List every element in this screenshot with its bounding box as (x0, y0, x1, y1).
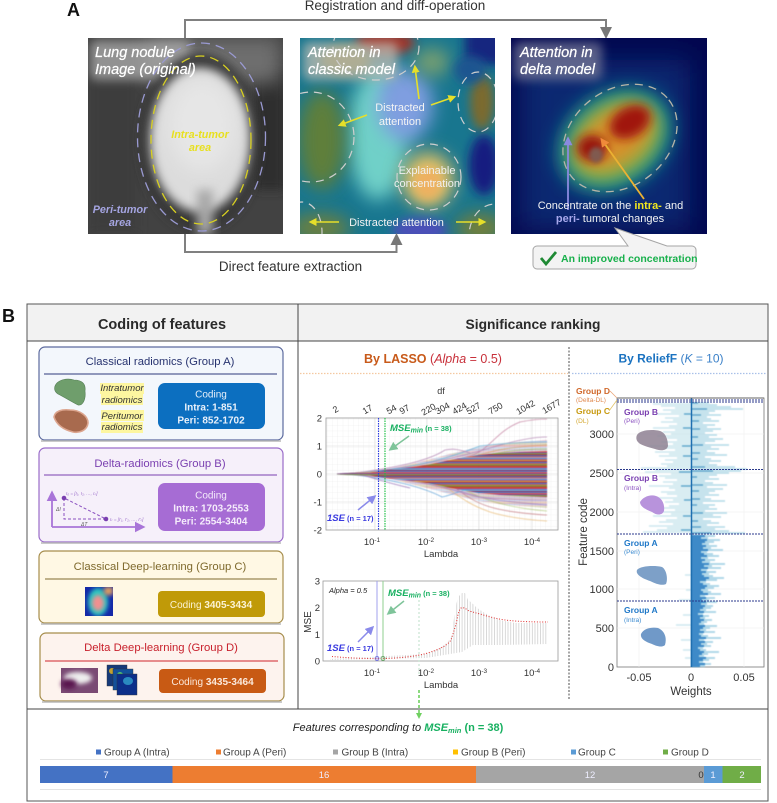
y axis ticks: 2 (317, 414, 322, 424)
title: features corresponding to MSEmin: Features corresponding to MSE (293, 722, 448, 734)
title: features corresponding to MSEmin: min (448, 726, 462, 735)
x axis ticks: -0.05 (626, 672, 652, 684)
label: group B intra (624, 473, 658, 492)
legend: feature groups: Group C (578, 748, 616, 758)
callout: MSEmin n=38: min (409, 592, 421, 600)
coding box: group A (158, 383, 265, 429)
coding box: group A: Coding (195, 390, 227, 400)
arrows: distracted attention (311, 67, 484, 222)
legend: feature groups: Group D (671, 748, 709, 758)
note: alpha: Alpha = 0.5 (328, 586, 368, 595)
diagram: delta change: ΔT (80, 522, 88, 528)
icon: stacked delta attention maps (107, 665, 137, 695)
labels: radiomics types (100, 383, 144, 433)
arrow: registration route (185, 20, 606, 38)
panel: attention in classic model (300, 38, 495, 234)
coding box: group B (158, 483, 265, 531)
arrow: direct feature extraction (185, 234, 396, 252)
title: attention in delta model: delta model (520, 62, 596, 78)
top axis df values: 54 (385, 403, 398, 416)
bars: group B negative weights (641, 404, 691, 658)
callout: 1SE n=17 (327, 497, 374, 524)
arrow: peri-tumoral change (567, 139, 569, 210)
y axis label: MSE (303, 611, 314, 633)
y axis ticks: 0 (317, 470, 322, 480)
label: intra-tumor area: Intra-tumor (171, 129, 230, 141)
x axis ticks: 10 (471, 668, 481, 679)
label: group B peri: (Peri) (624, 418, 640, 425)
callout: MSEmin n=38 (388, 588, 450, 613)
y axis ticks: -1 (314, 498, 322, 508)
zero line (690, 398, 692, 667)
label: group B peri: Group B (624, 407, 658, 417)
stacked bar: selected feature counts: 1 (710, 770, 716, 781)
title: lung nodule image: Image (original) (95, 62, 196, 78)
coding box: group B: Peri: 2554-3404 (175, 516, 248, 528)
panel frame: part B (27, 304, 768, 801)
diagram: delta change (52, 491, 144, 528)
label: group A peri: (Peri) (624, 549, 640, 556)
label: group B intra: (Intra) (624, 485, 641, 492)
label: group D: (Delta-DL) (576, 397, 606, 404)
x axis ticks: -4 (534, 537, 541, 544)
callout: MSEmin n=38 (390, 423, 452, 449)
panel: attention in delta model (511, 38, 707, 234)
x axis ticks: 10 (524, 668, 534, 679)
y axis ticks: 1000 (590, 584, 614, 596)
arrow: dotted MSEmin link to feature bar (416, 600, 422, 719)
title: group C: Classical Deep-learning (Group C) (74, 561, 247, 573)
title: features corresponding to MSEmin: (n = 38) (461, 722, 504, 734)
x axis ticks: 10 (364, 668, 374, 679)
label: group C: (DL) (576, 418, 589, 425)
x axis ticks: 10 (524, 537, 534, 548)
label: direct feature extraction: Direct feature extraction (219, 259, 362, 274)
stacked bar: selected feature counts: 2 (739, 770, 745, 781)
legend: feature groups: Group B (Intra) (342, 748, 408, 758)
x axis ticks: 10 (418, 537, 428, 548)
x axis ticks: 10 (364, 537, 374, 548)
label: group A intra (624, 605, 658, 624)
label: group A peri (624, 538, 658, 556)
legend: feature groups: Group B (Peri) (461, 748, 525, 758)
x axis ticks: 10 (471, 537, 481, 548)
annotations: classic model attention text: Distracted (375, 102, 425, 114)
y axis ticks (314, 414, 322, 536)
bars: group A light (691, 536, 725, 666)
callout: MSEmin n=38: MSE (390, 423, 411, 434)
title: attention in classic model: Attention in (307, 45, 381, 61)
icon: group A peri nodule (637, 566, 667, 585)
callout: MSEmin n=38: min (411, 428, 423, 434)
top axis df values: 17 (361, 403, 374, 416)
label: group A intra: (Intra) (624, 617, 641, 624)
top axis df values: 97 (398, 403, 411, 416)
section label B: B (2, 306, 15, 326)
stacked bar: selected feature counts: 0 (698, 770, 704, 781)
legend: feature groups: Group A (Peri) (223, 748, 286, 758)
top axis df values: df (437, 386, 445, 396)
bars: group A dark core (691, 536, 709, 666)
coding box: group A: Peri: 852-1702 (177, 416, 245, 426)
icon: group B peri nodule (636, 430, 668, 450)
label: group D (576, 386, 617, 404)
group boundaries (617, 400, 764, 601)
y axis ticks: 3000 (590, 429, 614, 441)
annotations: classic model attention text (349, 102, 460, 229)
top axis df values: 220 (419, 401, 438, 417)
coding box: group C: Coding 3405-3434 (170, 600, 253, 611)
callout: MSEmin n=38: (n = 38) (421, 589, 450, 598)
panel: delta-radiomics group B (39, 448, 283, 543)
label: group A peri: Group A (624, 538, 658, 548)
legend: feature groups: Group A (Intra) (104, 748, 170, 758)
top axis df values: 527 (464, 400, 483, 416)
chart: ReliefF weights (576, 386, 764, 698)
top axis df values: 750 (486, 400, 505, 416)
label: group C (576, 400, 617, 425)
chart: MSE versus lambda (303, 576, 558, 691)
stacked bar: selected feature counts (40, 766, 761, 783)
top axis df values: 1042 (514, 398, 537, 417)
x axis ticks: -3 (481, 668, 488, 675)
annotations: classic model attention text: attention (379, 116, 421, 128)
y axis ticks: 2500 (590, 468, 614, 480)
x axis ticks (364, 537, 541, 548)
panel: classical radiomics group A (39, 347, 283, 441)
icon: intratumor nodule (55, 379, 85, 405)
diagram: delta change: I₀ = [I₁, I₂, …, Iₙ] (66, 491, 98, 496)
chart: LASSO coefficient paths (314, 386, 563, 560)
x axis label: Weights (670, 686, 712, 698)
icon: classic attention map (85, 587, 113, 616)
coding box: group A: Intra: 1-851 (184, 402, 238, 414)
top axis df values: 2 (331, 404, 340, 415)
bars: group B positive weights (691, 403, 747, 533)
callout: 1SE n=17: 1SE (n = 17) (327, 513, 374, 524)
annotation: concentrate on changes: Concentrate on the intra- and (538, 200, 683, 212)
x axis ticks: -2 (428, 668, 435, 675)
label: group A intra: Group A (624, 605, 658, 615)
coding box: group B: Coding (195, 490, 227, 502)
label: group C: Group C (576, 406, 610, 416)
y axis ticks: 1 (315, 630, 320, 641)
panel: delta deep-learning group D (40, 633, 284, 702)
y axis ticks (590, 429, 614, 674)
labels: radiomics types: Intratumor (100, 383, 144, 394)
icon: peritumor nodule (54, 410, 88, 432)
coding box: group D (159, 669, 266, 693)
label: peri-tumor area: area (109, 217, 131, 229)
heading: coding of features: Coding of features (98, 317, 226, 333)
x axis ticks: -4 (534, 668, 541, 675)
x axis ticks: 0.05 (733, 672, 755, 684)
annotations: classic model attention text: Distracted attention (349, 217, 444, 229)
top axis df values: 304 (433, 400, 452, 416)
coding box: group D: Coding 3435-3464 (171, 677, 254, 688)
panel: lung nodule original image (88, 38, 285, 234)
icon: group A intra nodule (641, 628, 666, 647)
title: attention in classic model: classic model (308, 62, 396, 78)
y axis label: Feature code (578, 498, 590, 566)
annotation: concentrate on changes: peri- tumoral changes (556, 213, 664, 225)
diagram: delta change: ΔI (55, 507, 61, 513)
label: group B peri (624, 407, 658, 425)
heading: by ReliefF: By ReliefF (K = 10) (618, 352, 724, 366)
label: intra-tumor area: area (189, 142, 211, 154)
callout: 1SE n=17 (327, 628, 374, 654)
y axis ticks: 2 (315, 603, 320, 614)
x axis label: Lambda (424, 680, 459, 691)
y axis ticks: 3 (315, 576, 320, 588)
title: attention in delta model: Attention in (519, 45, 593, 61)
stacked bar: selected feature counts: 12 (585, 770, 595, 781)
coding box: group C (158, 591, 265, 617)
labels: radiomics types: radiomics (102, 422, 143, 433)
x axis ticks: 10 (418, 668, 428, 679)
label: peri-tumor area: Peri-tumor (93, 204, 148, 216)
top axis df values (331, 386, 563, 417)
label: group B intra: Group B (624, 473, 658, 483)
labels: radiomics types: radiomics (102, 395, 143, 406)
section label A: A (67, 0, 80, 20)
y axis ticks: 0 (608, 662, 614, 674)
icon: group B intra nodule (640, 495, 664, 514)
label: group D: Group D (576, 386, 610, 396)
callout: MSEmin n=38: MSE (388, 588, 409, 599)
stacked bar: selected feature counts: 16 (319, 770, 329, 781)
x axis ticks: -3 (481, 537, 488, 544)
y axis ticks: 1 (317, 442, 322, 452)
diagram: delta change: Iₜ = [I′₁, I′₂, …, I′ₙ] (110, 517, 144, 522)
x axis label: Lambda (424, 549, 459, 560)
title: group D: Delta Deep-learning (Group D) (84, 642, 238, 654)
y axis ticks (315, 576, 320, 668)
y axis ticks: 2000 (590, 507, 614, 519)
x axis ticks (364, 668, 541, 679)
y axis ticks: -2 (314, 526, 322, 536)
title: group B: Delta-radiomics (Group B) (94, 458, 226, 470)
heading: by LASSO: By LASSO (Alpha = 0.5) (364, 352, 502, 366)
callout: 1SE n=17: 1SE (n = 17) (327, 643, 374, 654)
legend: feature groups (96, 748, 709, 758)
title: lung nodule image: Lung nodule (95, 45, 175, 61)
x axis ticks: -1 (374, 537, 381, 544)
labels: radiomics types: Peritumor (101, 411, 143, 422)
callout: an improved concentration: An improved concentration (561, 253, 698, 265)
stacked bar: selected feature counts: 7 (103, 770, 109, 781)
x axis ticks: 0 (688, 672, 694, 684)
arrow: intra-tumoral change (602, 140, 644, 199)
callout: an improved concentration (533, 228, 698, 269)
x axis ticks: -2 (428, 537, 435, 544)
top axis df values: 424 (450, 400, 469, 416)
icon: check mark (541, 252, 556, 264)
x axis ticks: -1 (374, 668, 381, 675)
y axis ticks: 1500 (590, 546, 614, 558)
icon: delta image (61, 668, 98, 693)
annotations: classic model attention text: concentration (394, 178, 460, 190)
coding box: group B: Intra: 1703-2553 (173, 504, 249, 514)
panel: classical deep-learning group C (39, 551, 283, 624)
annotations: classic model attention text: Explainable (399, 165, 455, 177)
bars: group B dark core (679, 403, 713, 533)
callout: MSEmin n=38: (n = 38) (423, 424, 452, 433)
top axis df values: 1677 (540, 397, 563, 416)
x axis ticks (626, 672, 755, 684)
heading: significance ranking: Significance ranking (466, 317, 600, 332)
y axis ticks: 0 (315, 656, 320, 668)
title: group A: Classical radiomics (Group A) (86, 356, 235, 368)
y axis ticks: 500 (596, 623, 614, 635)
